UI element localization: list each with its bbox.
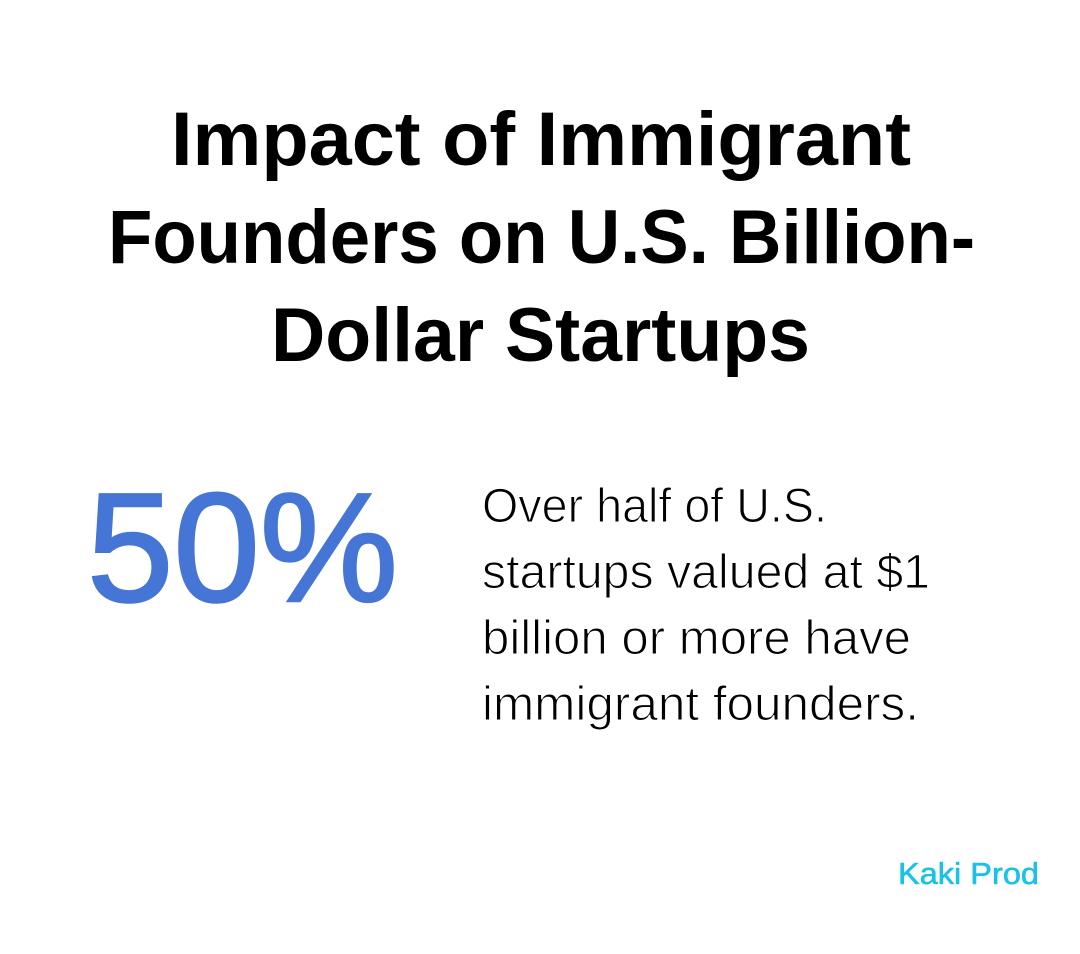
title: Founders on U.S. Billion- [108,195,975,280]
description text [482,480,930,731]
big statistic: 50%: 50% [87,461,398,634]
title [108,97,975,378]
description text: startups valued at $1 [482,546,930,599]
logo: Kaki Prod: Kaki Prod [898,856,1039,891]
description text: immigrant founders. [482,678,919,731]
title: Dollar Startups [271,293,810,378]
description text: billion or more have [482,612,911,665]
description text: Over half of U.S. [482,480,827,533]
title: Impact of Immigrant [171,97,911,182]
